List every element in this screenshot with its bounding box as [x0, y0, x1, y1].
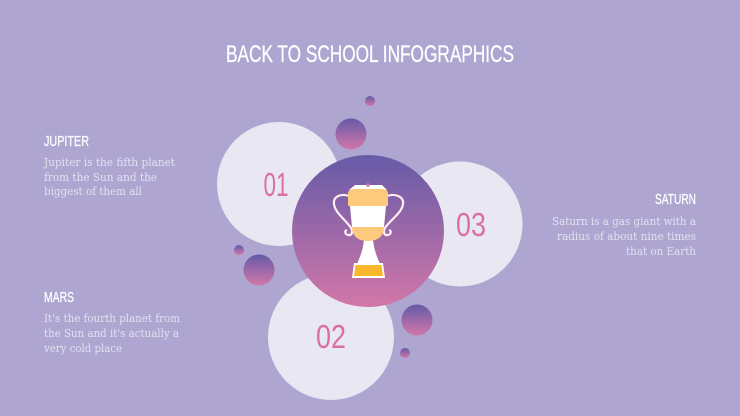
body: Mars [43, 311, 180, 355]
text block: Mars [43, 290, 180, 355]
body: Mars: very cold place [43, 341, 122, 355]
text block: Jupiter [43, 134, 175, 198]
trophy base [352, 263, 385, 278]
trophy white band [350, 206, 386, 227]
bubble: left small [234, 245, 244, 255]
trophy handles [334, 195, 403, 235]
trophy base plate [354, 265, 383, 276]
bubble: right large [402, 304, 432, 336]
body: Mars: the Sun and it's actually a [44, 326, 179, 340]
body: Mars: It's the fourth planet from [44, 311, 180, 325]
trophy top cup [348, 189, 388, 206]
bubble: top small [365, 96, 375, 106]
circle 03: 03 [456, 206, 486, 243]
bubble: right small [400, 348, 410, 358]
title: BACK TO SCHOOL INFOGRAPHICS [226, 41, 514, 68]
body: Jupiter [43, 155, 175, 198]
body: Jupiter: from the Sun and the [44, 170, 157, 184]
trophy lower cup [352, 227, 384, 241]
icon: trophy [334, 183, 403, 278]
body: Saturn: radius of about nine times [557, 229, 696, 243]
heading: Mars: MARS [44, 290, 74, 306]
heading: Jupiter: JUPITER [44, 134, 89, 150]
central circle [292, 155, 444, 307]
heading: Saturn: SATURN [655, 192, 696, 208]
body: Jupiter: biggest of them all [44, 184, 142, 198]
body: Saturn [552, 214, 696, 258]
body: Jupiter: Jupiter is the fifth planet [43, 155, 175, 169]
text block: Saturn [552, 192, 696, 258]
circle 01 [217, 122, 341, 246]
circle 02: 02 [316, 318, 346, 355]
circle 02 [268, 274, 394, 400]
trophy lid [349, 185, 387, 190]
circle 01: 01 [264, 166, 288, 203]
circle 03 [398, 162, 522, 286]
body: Saturn: Saturn is a gas giant with a [552, 214, 696, 228]
body: Saturn: that on Earth [626, 244, 696, 258]
trophy knob [366, 183, 370, 187]
bubble: left large [244, 254, 274, 286]
bubble: top large [336, 118, 366, 150]
trophy stem [357, 240, 380, 264]
